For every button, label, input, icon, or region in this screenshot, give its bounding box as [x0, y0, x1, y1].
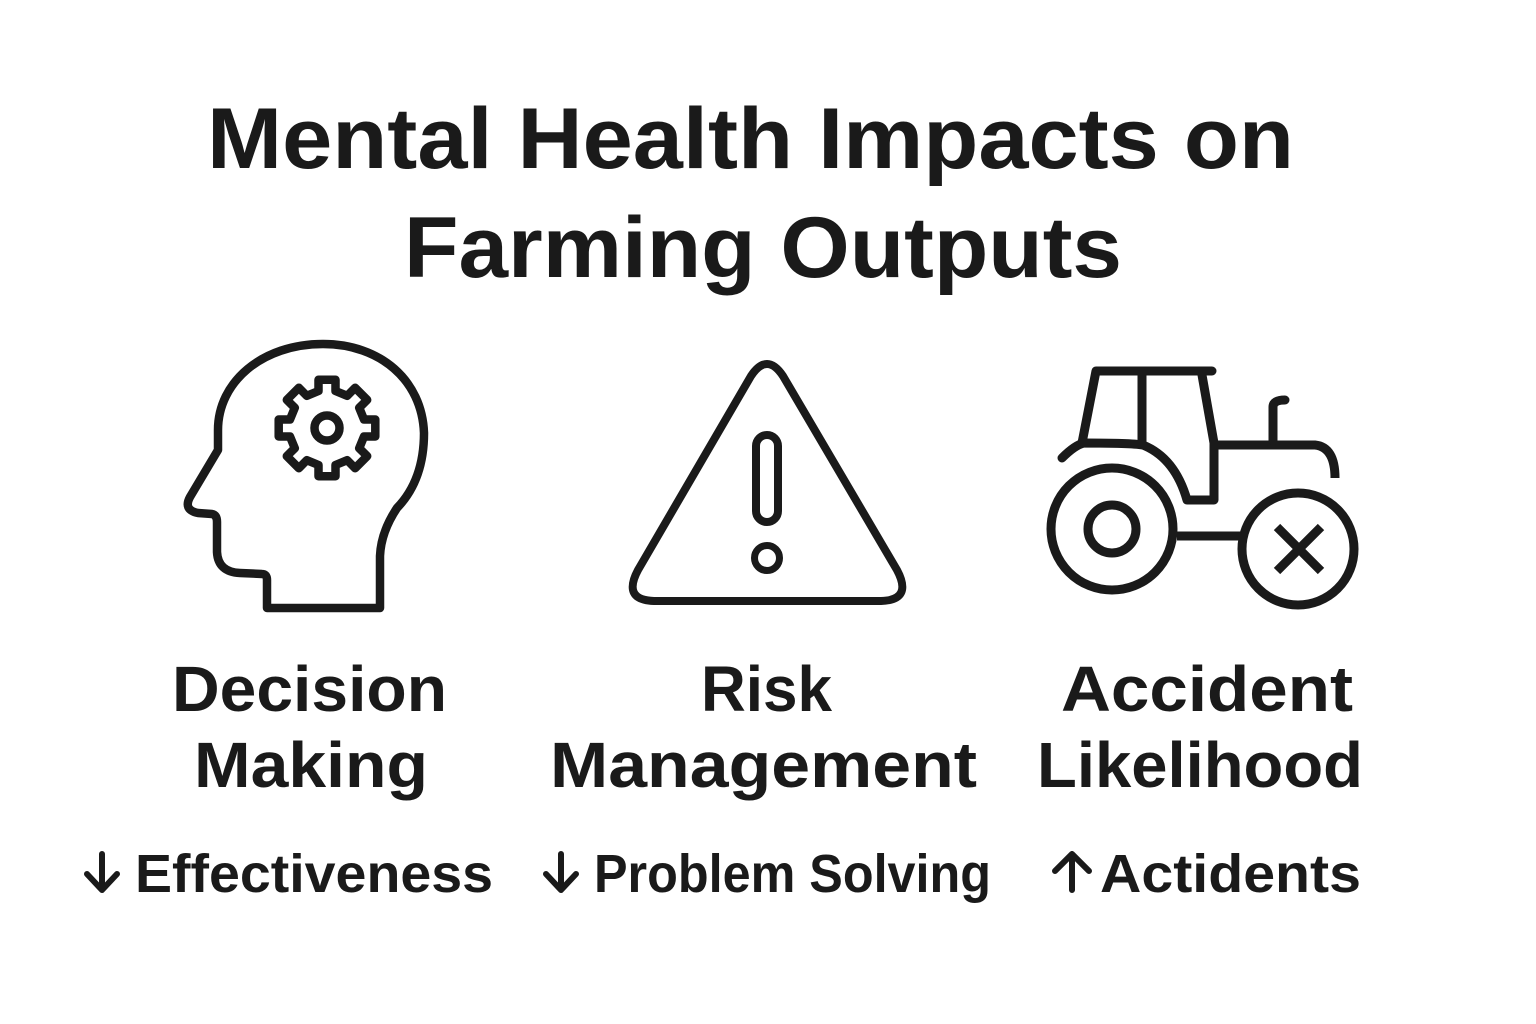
effect: accidents up: Actidents: [1100, 844, 1361, 904]
icon: head with gear: [188, 344, 424, 608]
icon: warning triangle: [633, 364, 902, 601]
label: accident likelihood: Likelihood: [1037, 729, 1363, 801]
label: decision making: Decision: [172, 653, 447, 725]
icon: gear: [279, 380, 375, 476]
label: accident likelihood: Accident: [1061, 653, 1353, 725]
title: Mental Health Impacts on: [207, 91, 1294, 187]
effect: problem solving down: Problem Solving: [594, 844, 991, 904]
label: decision making: [172, 653, 447, 801]
label: risk management: Management: [550, 729, 977, 801]
icon: tractor: [1051, 371, 1354, 605]
title: [207, 91, 1294, 296]
title: Farming Outputs: [404, 200, 1122, 296]
label: risk management: [550, 653, 977, 801]
icon: down arrow: [87, 854, 117, 890]
icon: up arrow: [1055, 854, 1089, 890]
icon: down arrow: [546, 854, 576, 890]
label: decision making: Making: [194, 729, 428, 801]
label: risk management: Risk: [701, 653, 832, 725]
label: accident likelihood: [1037, 653, 1363, 801]
effect: effectiveness down: Effectiveness: [135, 844, 493, 904]
